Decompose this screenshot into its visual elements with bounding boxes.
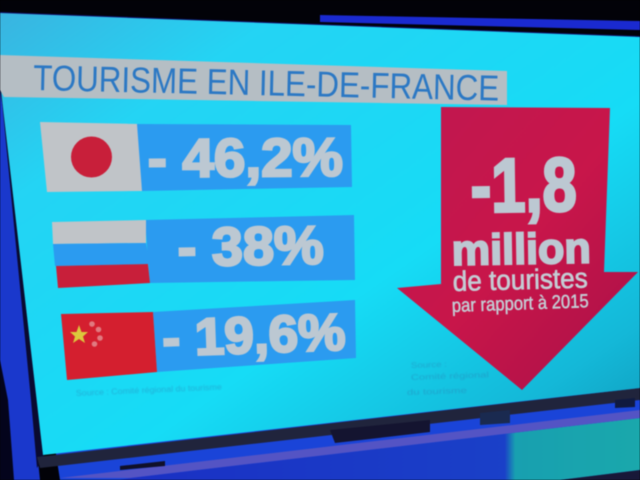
value text: Japan: - 46,2% <box>148 128 343 189</box>
row: Russia <box>52 215 355 288</box>
arrow subtitle: de touristes <box>452 262 588 297</box>
source note: Source : Comité régional du tourisme <box>76 383 223 398</box>
value bar: Japan <box>137 124 352 191</box>
arrow caption: par rapport à 2015 <box>451 291 589 317</box>
row: Japan <box>40 122 352 192</box>
title band <box>0 55 507 109</box>
icon: star <box>70 325 88 343</box>
value bar: China <box>153 300 356 372</box>
value bar: Russia <box>145 215 355 283</box>
arrow figure: -1,8 <box>470 143 577 229</box>
flag: China <box>61 312 157 380</box>
arrow unit: million <box>451 225 591 275</box>
side note <box>407 360 489 397</box>
title text: TOURISME EN ILE-DE-FRANCE <box>33 57 500 109</box>
flag: Russia <box>52 220 150 288</box>
row: China <box>61 300 356 380</box>
value text: China: - 19,6% <box>161 304 346 368</box>
side note: Source : <box>411 360 447 370</box>
side note: du tourisme <box>407 386 468 397</box>
value text: Russia: - 38% <box>177 215 324 278</box>
flag: Japan <box>40 122 142 192</box>
side note: Comité régional <box>411 370 489 382</box>
arrow <box>397 107 638 390</box>
